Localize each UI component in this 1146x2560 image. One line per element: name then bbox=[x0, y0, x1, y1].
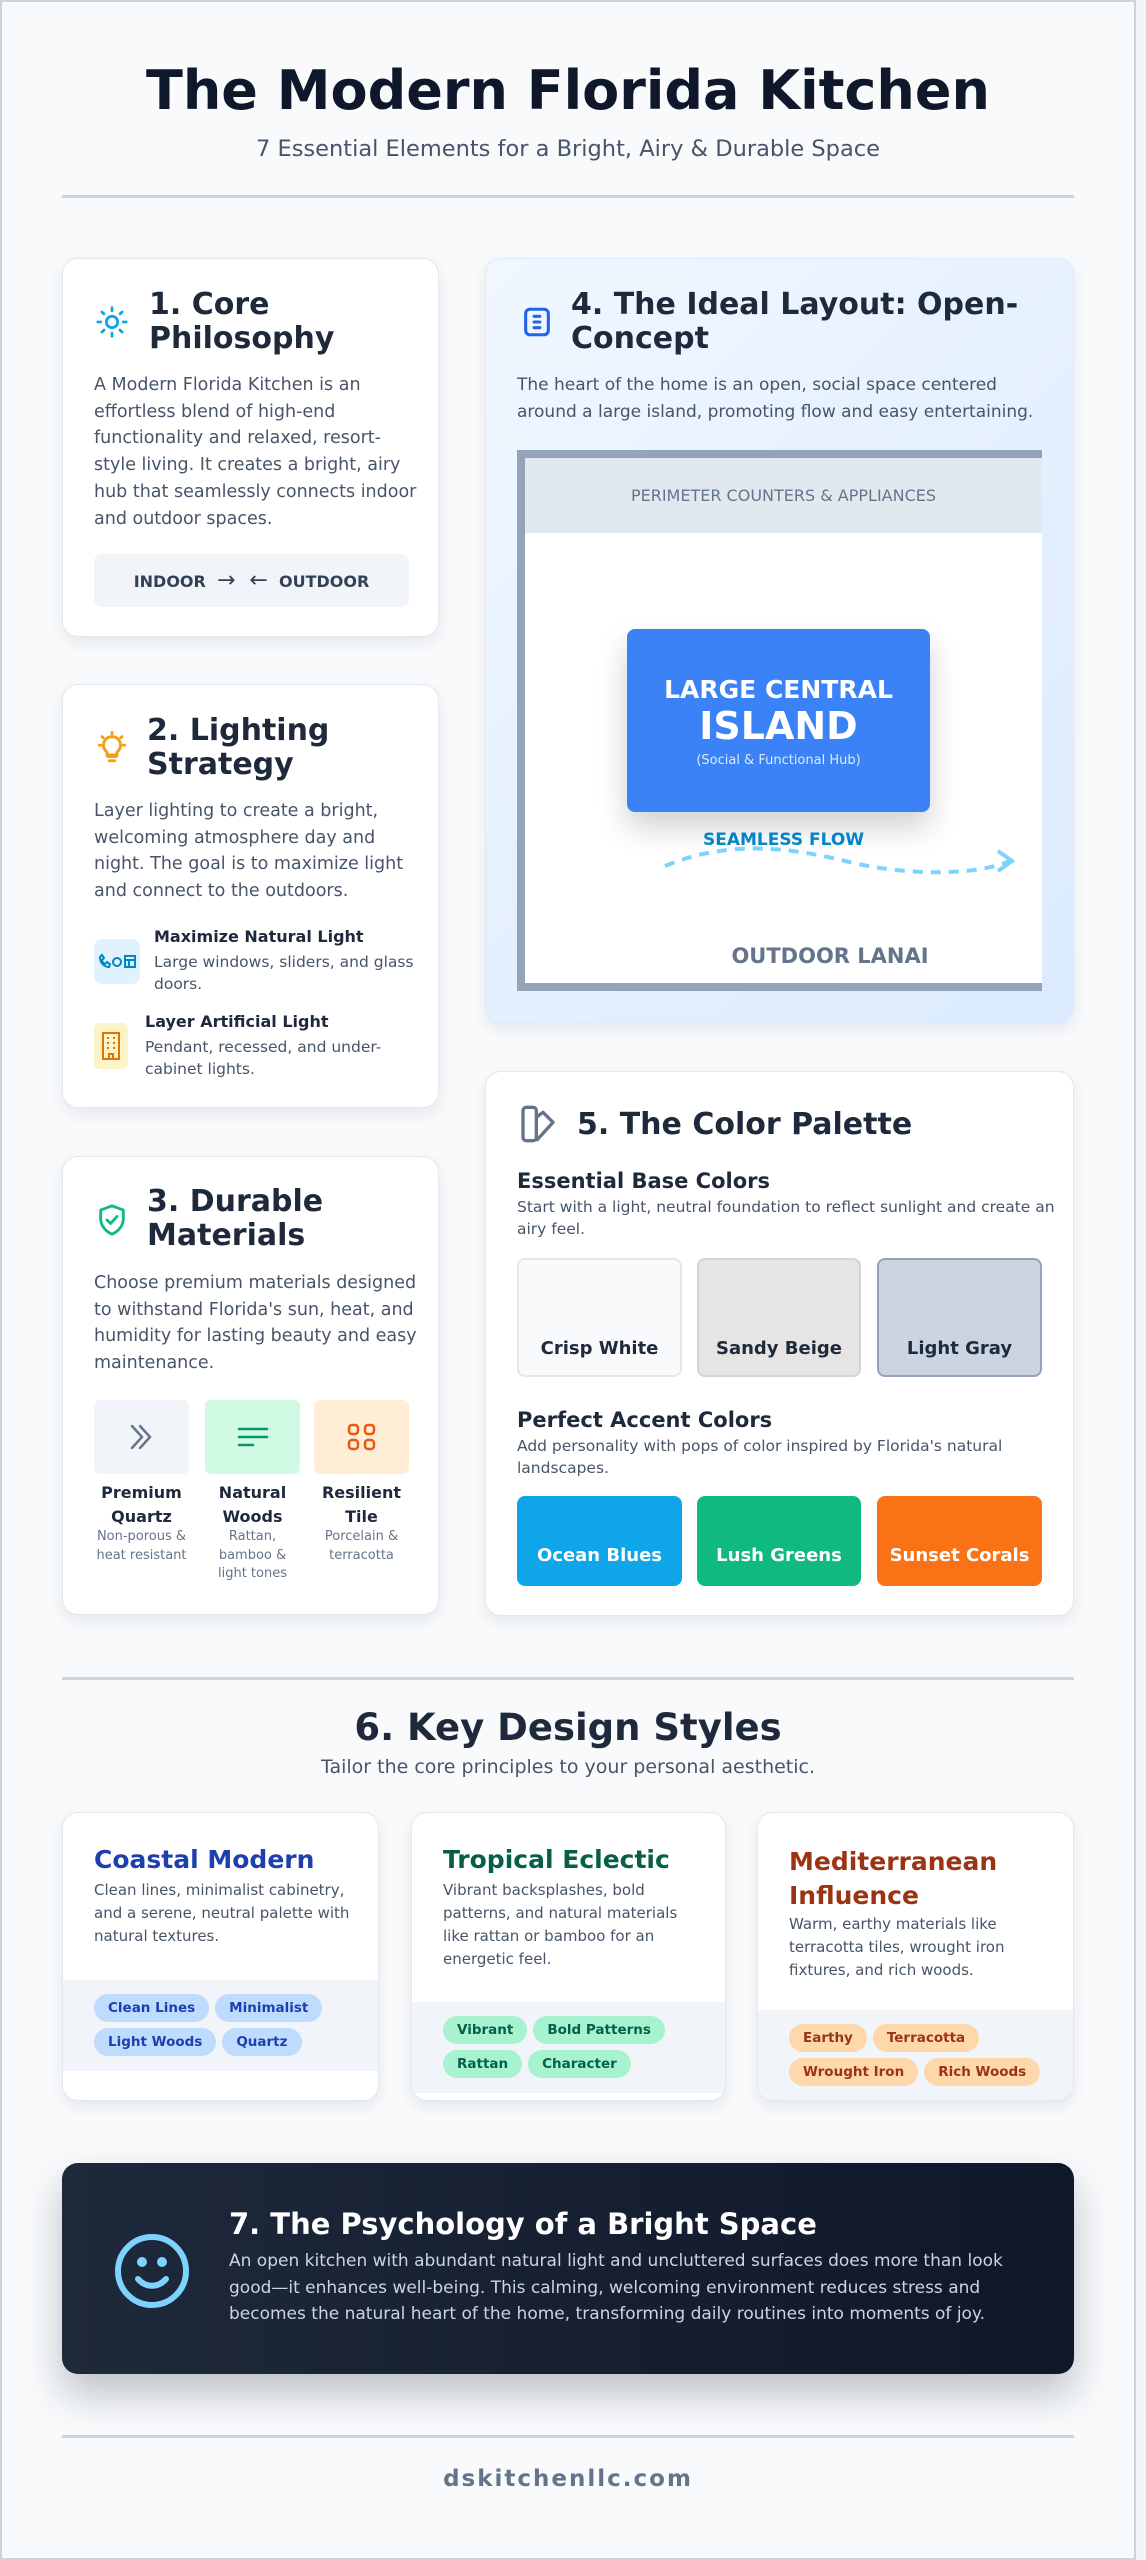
item: natural light: Maximize Natural Light bbox=[154, 927, 364, 946]
item: natural light bbox=[94, 927, 414, 993]
tags bbox=[758, 2010, 1075, 2102]
text: and connect to the outdoors. bbox=[94, 881, 348, 901]
tile: tile: Resilient Tile bbox=[322, 1483, 401, 1526]
panel: coastal modern: Clean lines, minimalist cabinetry, and a serene, neutral palette with natural textures. bbox=[94, 1881, 349, 1945]
panel: color palette: Lush Greens bbox=[716, 1545, 842, 1566]
icon: sun bbox=[96, 306, 128, 338]
panel: mediterranean: Mediterranean bbox=[789, 1847, 997, 1876]
icon: layout bbox=[524, 308, 550, 336]
island: LARGE CENTRAL bbox=[664, 675, 893, 704]
heading: 4. The Ideal Layout: Open- bbox=[571, 287, 1018, 322]
island: (Social & Functional Hub) bbox=[696, 753, 861, 768]
tags bbox=[63, 1980, 380, 2071]
tags: Terracotta bbox=[887, 2030, 965, 2046]
flow arrow bbox=[664, 846, 1016, 874]
text: Choose premium materials designed bbox=[94, 1273, 416, 1293]
tags: Vibrant bbox=[457, 2022, 513, 2038]
base colors heading: Essential Base Colors bbox=[517, 1169, 770, 1193]
item: artificial light: Layer Artificial Light bbox=[145, 1012, 328, 1031]
heading: 2. Lighting bbox=[147, 713, 329, 748]
indoor outdoor box bbox=[94, 554, 409, 607]
icon: bulb bbox=[98, 731, 126, 762]
text: Layer lighting to create a bright, bbox=[94, 801, 378, 821]
tile: quartz: Non-porous & heat resistant bbox=[96, 1529, 187, 1563]
text bbox=[94, 1273, 417, 1373]
panel: mediterranean: Warm, earthy materials like terracotta tiles, wrought iron fixtures, and rich woods. bbox=[789, 1915, 1004, 1979]
tags: Wrought Iron bbox=[803, 2064, 904, 2080]
item: artificial light: Pendant, recessed, and under-cabinet lights. bbox=[145, 1038, 381, 1078]
layout diagram bbox=[517, 450, 1042, 991]
panel: tropical eclectic: Tropical Eclectic bbox=[443, 1845, 670, 1874]
icon: shield bbox=[99, 1204, 125, 1236]
heading: Concept bbox=[571, 321, 709, 356]
panel: color palette bbox=[485, 1071, 1074, 1616]
text bbox=[94, 375, 416, 529]
heading: Strategy bbox=[147, 747, 294, 782]
text: humidity for lasting beauty and easy bbox=[94, 1326, 417, 1346]
heading: 3. Durable bbox=[147, 1184, 323, 1219]
icon: windows bbox=[94, 939, 140, 984]
tags: Light Woods bbox=[108, 2034, 202, 2050]
item: natural light: Large windows, sliders, and glass doors. bbox=[154, 953, 414, 993]
heading bbox=[147, 1184, 323, 1253]
perimeter band bbox=[525, 458, 1042, 533]
text: and outdoor spaces. bbox=[94, 509, 272, 529]
heading bbox=[147, 713, 329, 782]
tags: Clean Lines bbox=[108, 2000, 195, 2016]
panel: psychology bbox=[62, 2163, 1074, 2374]
tile: tile: Porcelain & terracotta bbox=[325, 1529, 398, 1563]
lanai label: OUTDOOR LANAI bbox=[731, 944, 929, 968]
tags: Minimalist bbox=[229, 2000, 308, 2016]
panel: tropical eclectic: Vibrant backsplashes, bold patterns, and natural materials like rattan or bamboo for an energetic feel. bbox=[443, 1881, 677, 1968]
section heading: design styles: 6. Key Design Styles bbox=[354, 1706, 782, 1749]
island: ISLAND bbox=[699, 704, 858, 748]
panel: coastal modern: Coastal Modern bbox=[94, 1845, 314, 1874]
heading: 5. The Color Palette bbox=[577, 1107, 912, 1142]
panel: ideal layout bbox=[485, 258, 1074, 1024]
panel: color palette: Sunset Corals bbox=[890, 1545, 1029, 1566]
panel: mediterranean bbox=[757, 1812, 1074, 2101]
title: The Modern Florida Kitchen bbox=[146, 59, 990, 122]
panel: color palette: Start with a light, neutral foundation to reflect sunlight and create an airy feel. bbox=[517, 1198, 1055, 1238]
panel: durable materials bbox=[62, 1156, 439, 1615]
tags: Rattan bbox=[457, 2056, 508, 2072]
tile: woods bbox=[205, 1400, 300, 1581]
tile: woods: Rattan, bamboo & light tones bbox=[218, 1529, 287, 1581]
panel: mediterranean: Influence bbox=[789, 1881, 919, 1910]
text bbox=[94, 801, 403, 901]
icon: smiley bbox=[115, 2234, 189, 2308]
tags: Earthy bbox=[803, 2030, 853, 2046]
text: night. The goal is to maximize light bbox=[94, 854, 403, 874]
subtitle: 7 Essential Elements for a Bright, Airy & Durable Space bbox=[256, 136, 880, 162]
heading: Philosophy bbox=[149, 321, 334, 356]
panel: coastal modern bbox=[62, 1812, 379, 2101]
tile: quartz bbox=[94, 1400, 189, 1563]
panel: lighting strategy bbox=[62, 684, 439, 1108]
heading bbox=[571, 287, 1018, 356]
text: maintenance. bbox=[94, 1353, 214, 1373]
accent swatches bbox=[517, 1496, 682, 1586]
tile: woods: Natural Woods bbox=[219, 1483, 286, 1526]
base swatches bbox=[517, 1258, 682, 1377]
heading: 7. The Psychology of a Bright Space bbox=[229, 2207, 817, 2241]
island bbox=[627, 629, 930, 812]
tags: Character bbox=[542, 2056, 617, 2072]
accent colors heading: Perfect Accent Colors bbox=[517, 1408, 772, 1432]
tile: tile bbox=[314, 1400, 409, 1563]
section subtitle: Tailor the core principles to your personal aesthetic. bbox=[321, 1756, 815, 1778]
flow label: SEAMLESS FLOW bbox=[703, 830, 864, 850]
item: artificial light bbox=[94, 1012, 381, 1078]
tags: Bold Patterns bbox=[547, 2022, 651, 2038]
accent swatches: Ocean Blues bbox=[537, 1545, 662, 1566]
icon: swatch bbox=[521, 1106, 555, 1142]
text: A Modern Florida Kitchen is an bbox=[94, 375, 361, 395]
footer: dskitchenllc.com bbox=[443, 2466, 693, 2492]
indoor outdoor box: INDOOR → ← OUTDOOR bbox=[134, 568, 369, 593]
panel: color palette: Sandy Beige bbox=[716, 1338, 842, 1359]
tags: Quartz bbox=[236, 2034, 288, 2050]
icon: building bbox=[94, 1023, 128, 1069]
text: hub that seamlessly connects indoor bbox=[94, 482, 416, 502]
tile: quartz: Premium Quartz bbox=[101, 1483, 182, 1526]
tags bbox=[412, 2002, 727, 2093]
text: welcoming atmosphere day and bbox=[94, 828, 375, 848]
panel: core philosophy bbox=[62, 258, 439, 637]
tags: Rich Woods bbox=[938, 2064, 1026, 2080]
text: The heart of the home is an open, social space centered around a large island, promoting flow and easy entertaining. bbox=[517, 375, 1033, 422]
text: An open kitchen with abundant natural light and uncluttered surfaces does more than look good—it enhances well-being. This calming, welcoming environment reduces stress and becomes the natural heart of the home, transforming daily routines into moments of joy. bbox=[229, 2251, 1003, 2324]
heading: 1. Core bbox=[149, 287, 269, 322]
panel: tropical eclectic bbox=[411, 1812, 726, 2101]
base swatches: Crisp White bbox=[541, 1338, 658, 1359]
panel: color palette: Add personality with pops of color inspired by Florida's natural landscapes. bbox=[517, 1437, 1002, 1477]
text: style living. It creates a bright, airy bbox=[94, 455, 400, 475]
text: to withstand Florida's sun, heat, and bbox=[94, 1300, 414, 1320]
perimeter band: PERIMETER COUNTERS & APPLIANCES bbox=[631, 486, 936, 505]
text: functionality and relaxed, resort- bbox=[94, 428, 381, 448]
heading: Materials bbox=[147, 1218, 305, 1253]
panel: color palette: Light Gray bbox=[907, 1338, 1012, 1359]
heading bbox=[149, 287, 334, 356]
text: effortless blend of high-end bbox=[94, 402, 335, 422]
